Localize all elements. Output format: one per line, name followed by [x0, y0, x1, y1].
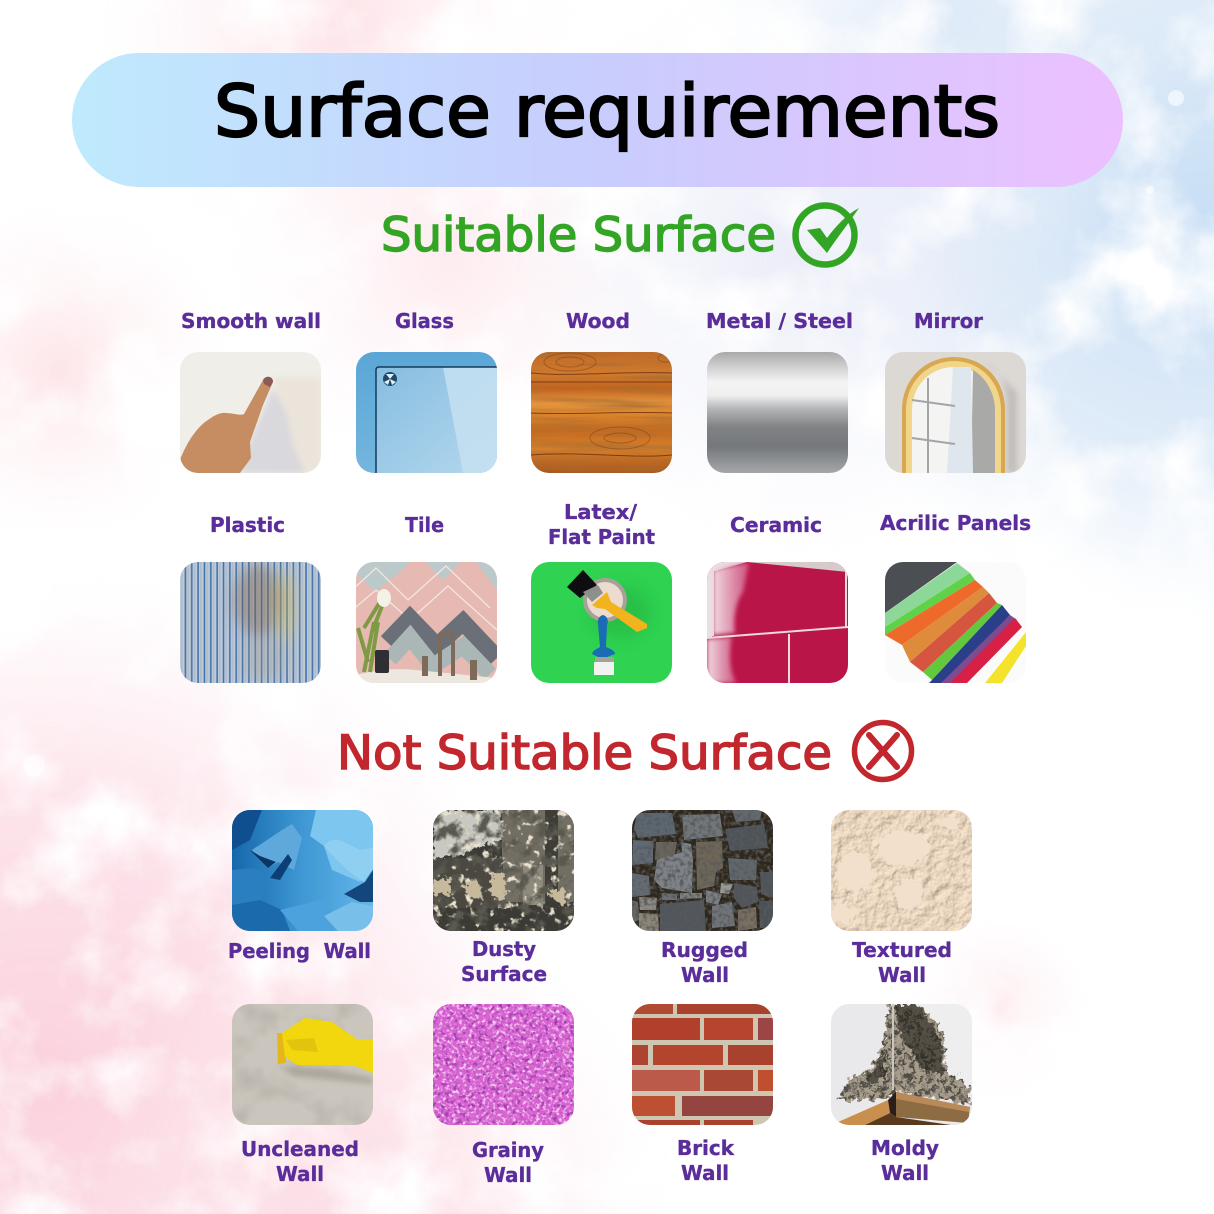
image: ceramic [707, 562, 848, 683]
suitable surface labels, row 1 [181, 309, 983, 333]
suitable surface labels, row 1: Glass [395, 309, 454, 333]
image: smooth wall [180, 352, 321, 473]
not suitable labels, row 1: Wall [878, 963, 926, 987]
not suitable labels, row 1: Wall [681, 963, 729, 987]
not suitable labels, row 1: Rugged [661, 938, 748, 962]
not suitable labels, row 2: Wall [681, 1161, 729, 1185]
not suitable labels, row 2 [241, 1136, 939, 1187]
image: peeling wall [232, 810, 373, 931]
image: acrylic panels [885, 562, 1026, 683]
suitable surface labels, row 1: Wood [566, 309, 630, 333]
not suitable labels, row 2: Moldy [871, 1136, 939, 1160]
suitable surface labels, row 2 [210, 500, 1031, 549]
image: rugged wall [632, 810, 773, 931]
not suitable labels, row 2: Wall [484, 1163, 532, 1187]
image: latex flat paint [531, 562, 672, 683]
title: Surface requirements [214, 70, 1000, 153]
not suitable labels, row 2: Wall [881, 1161, 929, 1185]
suitable surface labels, row 2: Tile [405, 513, 444, 537]
suitable surface labels, row 2: Ceramic [730, 513, 822, 537]
image: tile [350, 562, 497, 683]
suitable surface labels, row 1: Mirror [914, 309, 983, 333]
image: textured wall [829, 810, 972, 931]
icon: green check [796, 206, 859, 264]
not suitable labels, row 1 [228, 937, 952, 987]
image: brick wall [632, 1004, 773, 1125]
image: uncleaned wall [232, 1004, 373, 1125]
suitable surface labels, row 2: Acrilic Panels [880, 511, 1031, 535]
not suitable labels, row 2: Brick [677, 1136, 735, 1160]
image: moldy wall [831, 1004, 972, 1125]
not suitable labels, row 2: Wall [276, 1162, 324, 1186]
not suitable labels, row 1: Dusty [472, 937, 536, 961]
image: glass [356, 352, 497, 473]
suitable surface labels, row 2: Flat Paint [548, 525, 655, 549]
suitable surface labels, row 2: Latex/ [564, 500, 638, 524]
image: mirror [885, 352, 1026, 473]
image: plastic [180, 562, 321, 683]
title banner [72, 53, 1123, 187]
image: grainy wall [433, 1004, 574, 1125]
not suitable labels, row 1: Peeling Wall [228, 939, 371, 963]
not suitable labels, row 2: Grainy [472, 1138, 544, 1162]
image: metal steel [707, 352, 848, 473]
not suitable labels, row 2: Uncleaned [241, 1137, 359, 1161]
image: dusty surface [433, 810, 574, 931]
not suitable labels, row 1: Surface [461, 962, 547, 986]
icon: red cross [854, 722, 912, 780]
suitable surface labels, row 1: Smooth wall [181, 309, 321, 333]
suitable surface labels, row 2: Plastic [210, 513, 285, 537]
heading: not suitable surface: Not Suitable Surface [337, 726, 832, 781]
not suitable labels, row 1: Textured [852, 938, 952, 962]
suitable surface labels, row 1: Metal / Steel [706, 309, 853, 333]
image: wood [531, 352, 674, 473]
heading: suitable surface: Suitable Surface [381, 208, 776, 263]
